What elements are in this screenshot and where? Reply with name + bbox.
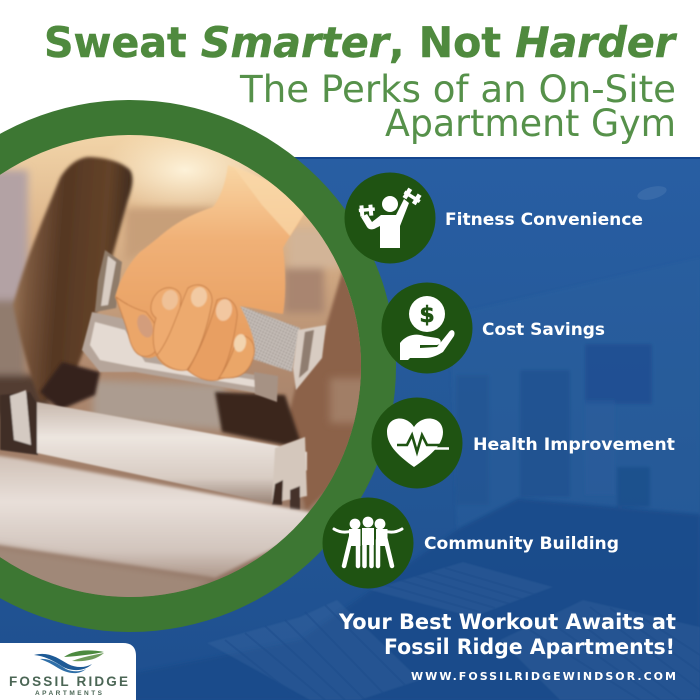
label: Fitness Convenience — [445, 210, 643, 230]
photo background glow — [118, 136, 256, 206]
photo weight plate — [13, 157, 132, 402]
icon: group of people — [322, 498, 414, 588]
panel: logo card — [0, 643, 136, 700]
photo lower dumbbell handle — [0, 390, 307, 510]
icon: heart with pulse line — [372, 398, 462, 488]
photo blurred rack — [0, 170, 340, 430]
label: Health Improvement — [473, 435, 675, 455]
panel: green ring around photo — [0, 100, 396, 632]
subtitle: The Perks of an On-Site — [239, 68, 676, 111]
photo floor bottom — [0, 542, 211, 597]
photo dark hub shadows — [215, 392, 300, 445]
title: Sweat Smarter, Not Harder — [44, 18, 677, 67]
photo fingernails — [137, 314, 153, 338]
room ceiling light — [638, 186, 666, 200]
photo right plate — [290, 272, 361, 509]
icon: person lifting dumbbells — [344, 172, 436, 264]
logo wordmark: FOSSIL RIDGE — [9, 674, 128, 689]
photo forearm and hand — [115, 165, 305, 381]
label: Cost Savings — [482, 320, 605, 340]
icon: hand holding dollar coin — [382, 282, 472, 374]
room wall and doors — [362, 346, 698, 598]
subtitle — [239, 68, 676, 145]
item: health improvement — [372, 398, 675, 488]
subtitle: Apartment Gym — [385, 102, 676, 145]
panel: blue room background — [0, 157, 700, 700]
label: Community Building — [424, 534, 619, 554]
room floor window reflections — [207, 562, 700, 700]
call to action: Fossil Ridge Apartments! — [384, 635, 675, 659]
call to action: Your Best Workout Awaits at — [338, 610, 676, 634]
item: community building — [322, 498, 619, 588]
photo knurled grip — [238, 305, 300, 372]
photo fingers — [116, 297, 161, 356]
panel: dumbbell photo — [0, 125, 380, 605]
photo front bar — [0, 440, 310, 578]
photo upper dumbbell collar — [82, 250, 278, 402]
icon: logo waves and leaf — [34, 650, 104, 673]
item: fitness convenience — [344, 172, 643, 264]
website url: WWW.FOSSILRIDGEWINDSOR.COM — [411, 670, 676, 683]
icon: hand holding dollar coin: $ — [419, 303, 435, 328]
item: cost savings — [382, 282, 605, 374]
call to action — [338, 610, 676, 659]
photo grip flange — [293, 325, 326, 390]
logo subtext: APARTMENTS — [35, 690, 103, 697]
